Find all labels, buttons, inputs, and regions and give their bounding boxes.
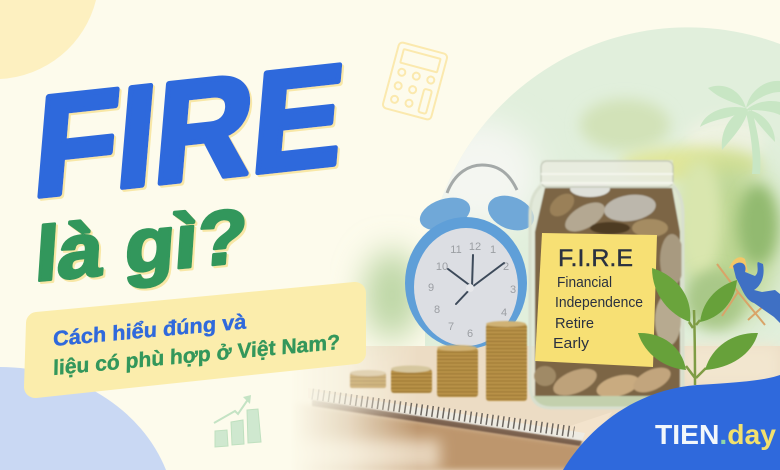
clock numerals: 12: [469, 241, 481, 253]
subtitle line 2: liệu có phù hợp ở Việt Nam?: [53, 331, 340, 380]
coin stacks: [350, 321, 527, 401]
subtitle line 1: Cách hiểu đúng và: [53, 310, 247, 351]
clock numerals: 8: [434, 304, 440, 316]
note text: F.I.R.E: [558, 245, 633, 272]
clock numerals: [428, 241, 516, 340]
clock numerals: 11: [450, 244, 462, 256]
clock numerals: 1: [490, 244, 496, 256]
note text: Independence: [555, 294, 643, 311]
clock numerals: 2: [503, 261, 509, 273]
calculator icon: [382, 42, 448, 120]
alarm clock: [405, 165, 539, 349]
title: là gì?: là gì?: [33, 194, 250, 298]
note text: [553, 245, 643, 352]
plant seedling: [638, 268, 758, 385]
decorative blue corner shape: [0, 367, 166, 470]
clock numerals: 9: [428, 282, 434, 294]
blurred foliage left of clock: [364, 250, 420, 340]
growth chart icon: [214, 395, 261, 447]
person relaxing on deck chair: [717, 257, 780, 325]
subtitle pill: [35, 293, 355, 387]
note text: Early: [553, 335, 590, 352]
photo: table surface: [290, 346, 780, 470]
note text: Retire: [555, 315, 594, 332]
decorative yellow corner shape: [0, 0, 96, 79]
clock numerals: 6: [467, 328, 473, 340]
photo backdrop: green circle with blurred foliage: [425, 28, 780, 346]
notebook: [308, 388, 612, 446]
table highlight behind plant: [685, 345, 780, 385]
palm tree icon: [700, 81, 780, 174]
clock hands: [448, 255, 504, 304]
glass jar with coins: [530, 160, 684, 408]
clock numerals: 3: [510, 284, 516, 296]
note text: Financial: [557, 274, 612, 291]
clock numerals: 7: [448, 321, 454, 333]
clock numerals: 10: [436, 261, 448, 273]
title: FIRE: FIRE: [28, 34, 350, 228]
TIEN.day logo panel: [563, 375, 780, 470]
clock numerals: 4: [501, 307, 507, 319]
logo text: TIEN.day: [655, 419, 776, 450]
sticky note: [535, 233, 657, 367]
